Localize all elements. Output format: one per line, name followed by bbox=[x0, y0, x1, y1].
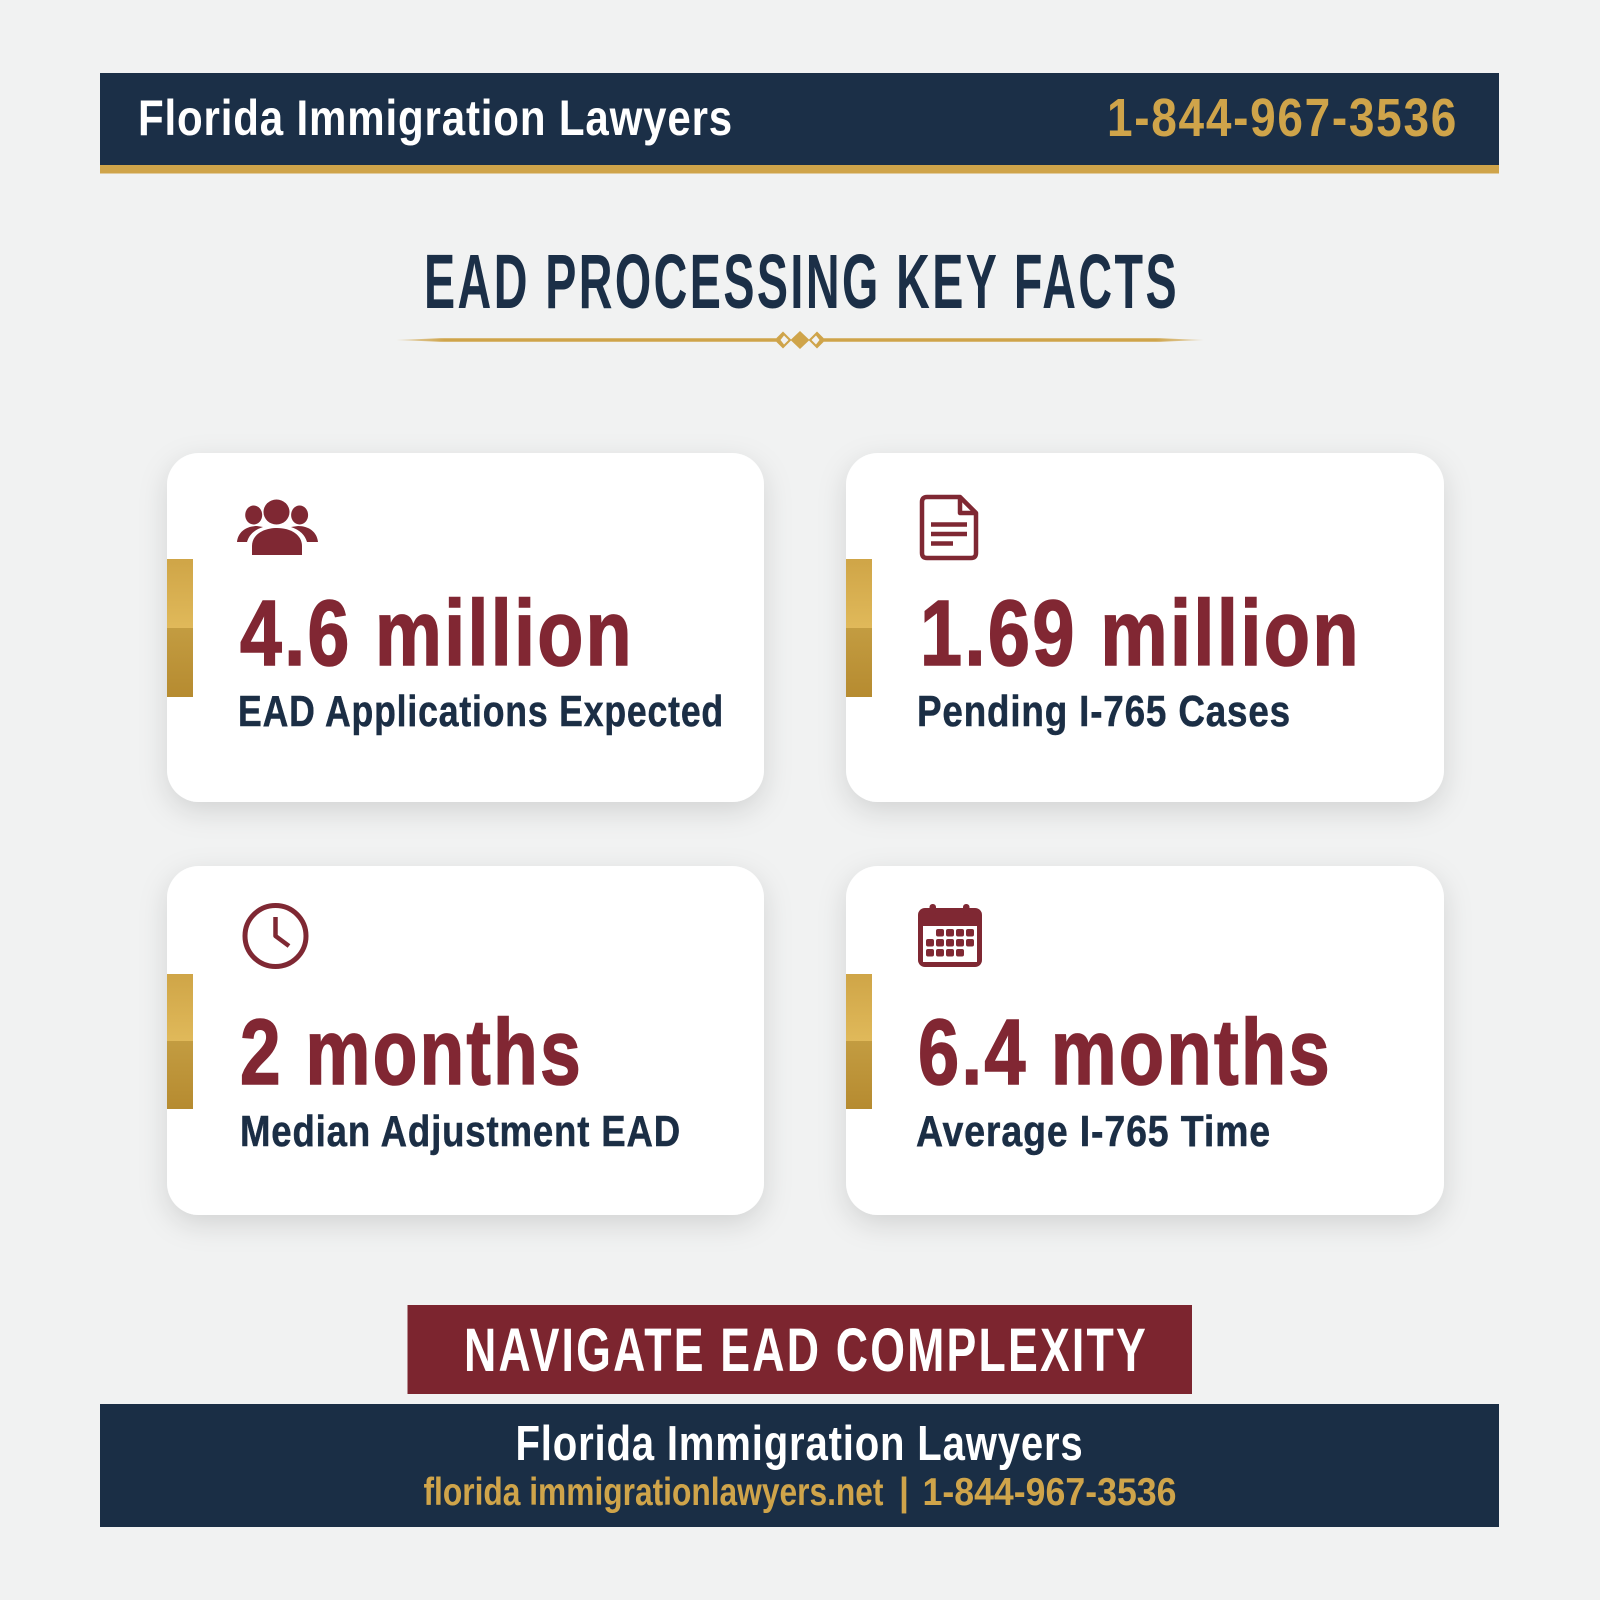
gold accent bar bbox=[846, 974, 872, 1109]
stat label: Median Adjustment EAD bbox=[240, 1107, 681, 1156]
icon: people group bbox=[237, 500, 318, 555]
icon: calendar bbox=[918, 904, 982, 967]
footer bar bbox=[100, 1404, 1499, 1527]
footer contact line: 1-844-967-3536 bbox=[922, 1471, 1176, 1514]
stat value: 2 months bbox=[240, 1000, 583, 1104]
footer contact line: | bbox=[899, 1471, 909, 1514]
card: EAD applications bbox=[167, 453, 764, 802]
footer firm name: Florida Immigration Lawyers bbox=[516, 1417, 1084, 1471]
gold accent bar bbox=[846, 559, 872, 697]
header firm name: Florida Immigration Lawyers bbox=[138, 90, 733, 146]
stat label: EAD Applications Expected bbox=[238, 687, 724, 736]
card: median adjustment bbox=[167, 866, 764, 1215]
header phone number: 1-844-967-3536 bbox=[1107, 88, 1458, 148]
card: average time bbox=[846, 866, 1444, 1215]
call to action banner bbox=[408, 1305, 1192, 1394]
stat value: 6.4 months bbox=[918, 1000, 1332, 1104]
footer contact line: florida immigrationlawyers.net bbox=[424, 1471, 884, 1514]
icon: clock bbox=[245, 906, 306, 966]
stat label: Pending I-765 Cases bbox=[917, 687, 1291, 736]
call to action text: NAVIGATE EAD COMPLEXITY bbox=[464, 1316, 1148, 1384]
icon: document bbox=[922, 497, 976, 558]
stat label: Average I-765 Time bbox=[916, 1107, 1271, 1156]
title divider ornament bbox=[396, 331, 1204, 349]
stat value: 4.6 million bbox=[240, 581, 634, 685]
header bar bbox=[100, 73, 1499, 174]
card: pending cases bbox=[846, 453, 1444, 802]
gold accent bar bbox=[167, 974, 193, 1109]
gold accent bar bbox=[167, 559, 193, 697]
stat value: 1.69 million bbox=[920, 581, 1361, 685]
